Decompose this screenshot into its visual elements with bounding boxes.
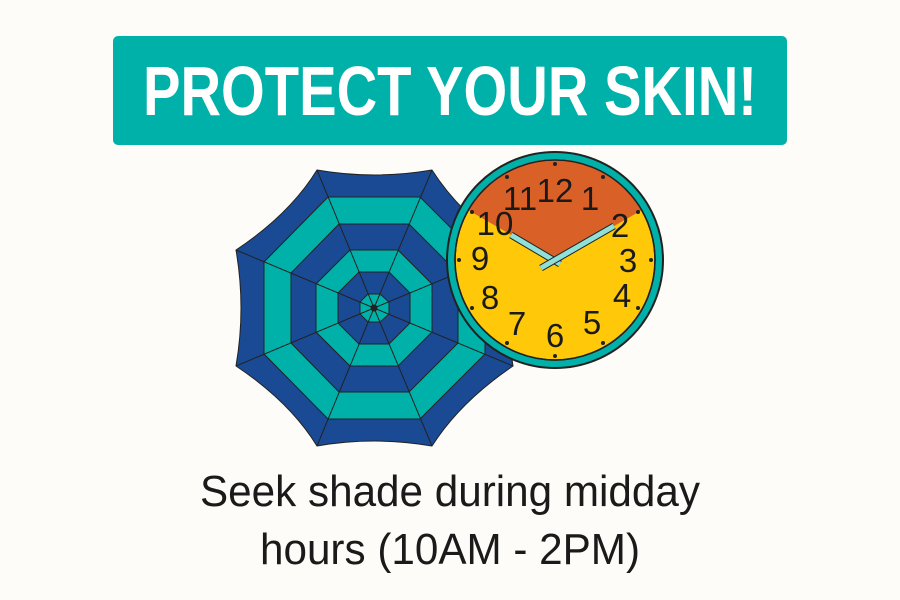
icon: clock: 3 [619,242,637,279]
icon: clock: 8 [481,279,499,316]
caption [200,467,700,574]
icon: clock: 9 [471,240,489,277]
icon: clock: 4 [613,277,631,314]
icon: clock: 1 [581,180,599,217]
icon: umbrella [236,170,513,446]
icon: clock [447,152,663,368]
caption: Seek shade during midday [200,467,700,516]
icon: clock: 10 [477,205,513,242]
icon: clock: 2 [611,207,629,244]
icon: clock: 7 [508,305,526,342]
title: PROTECT YOUR SKIN! [143,52,757,130]
caption: hours (10AM - 2PM) [260,525,640,574]
icon: clock: 12 [537,172,573,209]
title [113,36,787,145]
icon: clock: 5 [583,304,601,341]
icon: clock: 11 [503,180,537,217]
icon: clock: 6 [546,317,564,354]
